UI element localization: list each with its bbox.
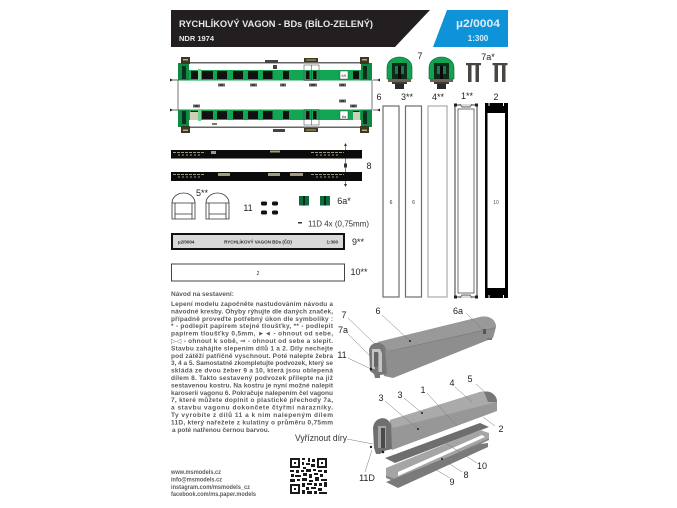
- part 3 strip: 6: [412, 200, 415, 206]
- 3D view callout labels: 6a: [453, 306, 463, 316]
- contact links: info@msmodels.cz: [171, 476, 222, 484]
- leader lines: [347, 313, 495, 478]
- instructions text: a stavbu vagonu dokončete čtyřmi nárazníky.: [171, 405, 333, 412]
- part 9 nameplate: 1:300: [326, 240, 338, 244]
- contact links: instagram.com/msmodels_cz: [171, 484, 250, 491]
- part 9 plate: [386, 443, 488, 488]
- part 8 label: 8: [366, 161, 372, 171]
- instructions text: ▷◁ - ohnout k sobě, ⇒ - ohnout od sebe a slepit.: [171, 338, 333, 345]
- part labels row: 4**: [432, 92, 444, 102]
- part 10 strip: 2: [257, 271, 260, 277]
- 3D view callout labels: 10: [477, 461, 487, 471]
- part 9 label: 9**: [352, 237, 364, 247]
- part 6a label: 6a*: [337, 196, 351, 206]
- instructions text: papírem tloušťky 0,5mm, ►◄ - ohnout od sebe,: [171, 331, 333, 338]
- header badge: code and scale: [433, 10, 508, 47]
- part 6a squares: [299, 196, 330, 206]
- wagon side sheets: 6a: [342, 114, 347, 119]
- part 6 strip: 6: [390, 200, 393, 206]
- instructions text: Ty vyrobíte z dílů 11 a k nim nalepeným dílem: [171, 411, 333, 419]
- part 8 plate: [386, 430, 489, 483]
- instructions text: případně proveďte potřebný úkon dle symboliky :: [171, 316, 333, 323]
- wagon side sheets: [170, 57, 380, 133]
- part 7a label: 7a*: [481, 52, 495, 62]
- 3D view callout labels: 1: [420, 385, 426, 395]
- QR code: [290, 458, 327, 494]
- part 7 front B: [429, 57, 454, 89]
- 3D view callout labels: 3: [397, 390, 403, 400]
- instructions text: pod zátěží patřičně vyschnout. Poté nalepte žebra: [171, 353, 333, 360]
- instructions text: 7, které můžete doplnit o plastické přechody 7a,: [171, 396, 333, 404]
- 3D view: assembled wagon: [369, 316, 496, 378]
- 3D view callout labels: 11D: [359, 473, 375, 483]
- instructions text: návodné kresby. Ohyby rýhujte dle daných značek,: [171, 308, 333, 315]
- part 7 front A: [387, 57, 412, 89]
- 3D view callout labels: 3: [378, 393, 384, 403]
- leader dots: [370, 340, 443, 460]
- instructions text: * - podlepit papírem stejné tloušťky, ** - podlepit: [171, 323, 334, 330]
- title text: RYCHLÍKOVÝ VAGON - BDs (BÍLO-ZELENÝ): [179, 18, 373, 30]
- 3D view callout labels: 2: [498, 424, 504, 434]
- instructions text: 11D, který nařežete z kulatiny o průměru 0,75mm: [171, 418, 333, 426]
- part labels row: 2: [493, 92, 499, 102]
- instructions text: a poté natřenou černou barvou.: [172, 427, 270, 434]
- contact links: [170, 469, 256, 498]
- instructions text: [171, 291, 334, 434]
- 3D view callout labels: 6: [375, 306, 381, 316]
- 3D view callout labels: 7: [341, 310, 347, 320]
- part labels row: 3**: [401, 92, 414, 102]
- part 7 label: 7: [417, 51, 423, 61]
- part 9 nameplate: RYCHLÍKOVÝ VAGON BDs (ČD): [224, 238, 292, 244]
- 3D view callout labels: 8: [463, 470, 469, 480]
- part 9 nameplate: [172, 234, 344, 249]
- subtitle: NDR 1974: [179, 34, 215, 43]
- instructions text: Lepení modelu započněte nastudováním návodu a: [171, 301, 333, 308]
- instructions text: Návod na sestavení:: [171, 291, 234, 298]
- contact links: facebook.com/ms.paper.models: [171, 491, 256, 498]
- header badge: code and scale: 1:300: [468, 34, 489, 43]
- instructions text: karoserii vagonu 6. Pokračuje nalepením čel vagonu: [171, 390, 333, 397]
- part labels row: 6: [376, 92, 382, 102]
- part 10 label: 10**: [350, 267, 368, 277]
- 3D view callout labels: 9: [449, 477, 455, 487]
- part 2 frame: [485, 103, 508, 298]
- part 6 strip: [383, 106, 399, 297]
- part 7a crossing A: [466, 63, 481, 82]
- part 2 frame: 10: [493, 200, 499, 206]
- part 11D note: 11D 4x (0,75mm): [308, 218, 369, 228]
- instructions text: 3, 4 a 5. Samostatně zkompletujte podvozek, který se: [171, 360, 333, 367]
- part 7a crossing B: [492, 63, 508, 82]
- part labels row: 1**: [461, 91, 474, 101]
- part 11 blocks: [261, 202, 278, 214]
- 3D view callout labels: 11: [337, 350, 347, 360]
- part 5 label: 5**: [196, 188, 208, 198]
- part 8 strips: [171, 143, 362, 187]
- part 1 frame: [454, 104, 478, 298]
- part labels row: [376, 91, 499, 102]
- instructions text: Stavbu zahájíte slepením dílů 1 a 2. Díly nechejte: [171, 344, 333, 352]
- 3D view callout labels: 4: [449, 378, 455, 388]
- 3D view callout labels: [337, 306, 504, 487]
- 3D view: exploded body: [373, 392, 497, 454]
- header banner: title: [171, 10, 430, 47]
- 3D view callout labels: 5: [467, 374, 473, 384]
- cut holes label: Vyříznout díry: [295, 433, 347, 443]
- header badge: code and scale: µ2/0004: [456, 18, 501, 30]
- instructions text: dílem 8. Takto sestavený podvozek přilepte na již: [171, 375, 334, 382]
- contact links: www.msmodels.cz: [170, 469, 221, 476]
- instructions text: skládá ze dvou žeber 9 a 10, která jsou oblepená: [171, 368, 333, 375]
- part 3 strip: [406, 106, 422, 297]
- part 9 nameplate: µ2/0004: [178, 240, 195, 244]
- part 5 arches: [172, 193, 229, 219]
- 3D view callout labels: 7a: [338, 325, 348, 335]
- part 4 strip: [428, 106, 447, 297]
- wagon side sheets: 6S: [342, 73, 347, 78]
- part 10 plate: [385, 423, 489, 463]
- part 11 label: 11: [243, 203, 253, 213]
- part 10 strip: [172, 264, 344, 281]
- instructions text: sestavenou kostru. Na kostru je nyní možné nalepit: [171, 382, 334, 389]
